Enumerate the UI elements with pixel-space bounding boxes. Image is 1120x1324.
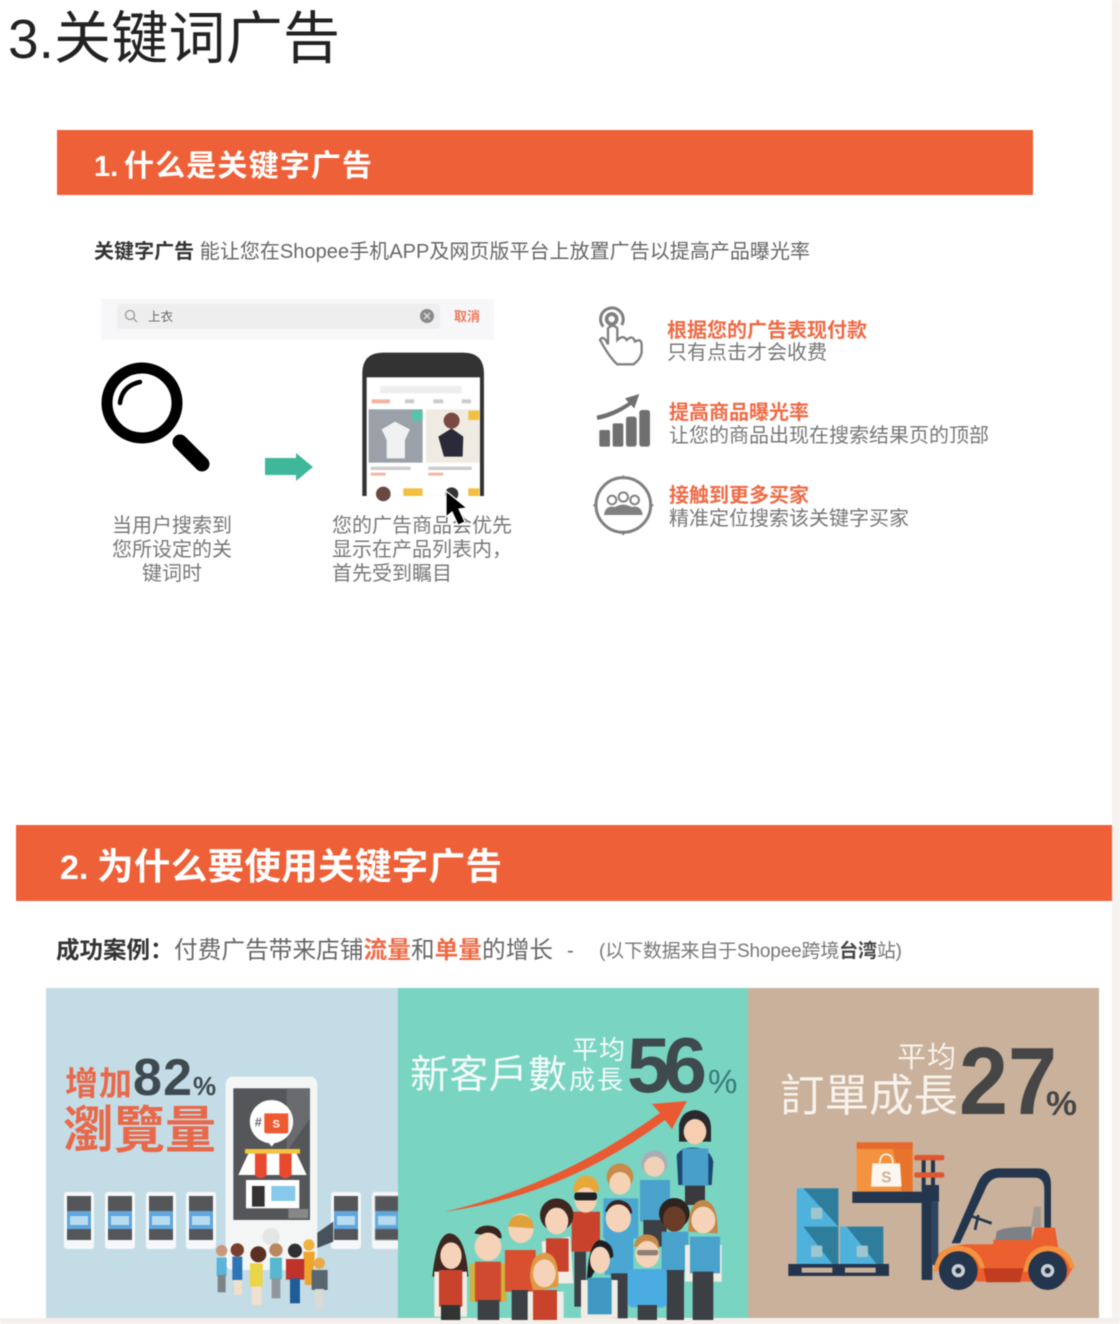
blue boxes on pallet — [788, 1188, 889, 1276]
panel heading: 56%: 新客戶數 — [410, 1054, 567, 1097]
intro text: 关键字广告 能让您在Shopee手机APP及网页版平台上放置广告以提高产品曝光率 — [94, 239, 810, 263]
benefit: reach buyers: 精准定位搜索该关键字买家 — [669, 507, 909, 530]
success case line: 付费广告带来店铺流量和单量的增长 — [174, 937, 553, 964]
large phone with shop: S — [273, 1119, 281, 1131]
orange box: S — [881, 1169, 891, 1186]
arrow: search to result — [265, 453, 313, 481]
panel heading: 56% — [410, 1021, 737, 1109]
panel heading: 27%: 27 — [959, 1028, 1057, 1135]
section header: what is keyword advertising — [57, 130, 1033, 195]
panel heading: 82%: 增加 — [65, 1065, 132, 1102]
group of shoppers — [216, 1239, 328, 1310]
panel heading: 82% — [63, 1049, 216, 1159]
large phone with shop: # — [255, 1116, 262, 1130]
icon: rising bars — [597, 394, 650, 447]
crowd of people — [432, 1109, 722, 1321]
panel heading: 27% — [780, 1028, 1077, 1135]
forklift with boxes — [788, 1142, 1075, 1290]
wheels — [939, 1251, 1067, 1290]
caption: user search: 当用户搜索到 — [112, 514, 232, 537]
panel heading: 82%: % — [193, 1071, 216, 1101]
section header: what is keyword advertising: 什么是关键字广告 — [124, 150, 372, 183]
title: 关键词广告 — [54, 7, 340, 71]
search bar — [101, 299, 494, 340]
caption: ad priority: 显示在产品列表内， — [332, 538, 512, 561]
caption: ad priority: 您的广告商品会优先 — [332, 514, 512, 537]
benefit: pay by performance: 只有点击才会收费 — [667, 341, 827, 364]
panel heading: 56%: 成長 — [569, 1065, 623, 1095]
panel heading: 56%: % — [708, 1063, 737, 1100]
mouse cursor — [446, 491, 467, 525]
icon: tapping hand — [600, 308, 642, 364]
benefit: pay by performance: 根据您的广告表现付款 — [667, 319, 867, 342]
row of small phones — [64, 1192, 402, 1249]
phone with search results — [362, 353, 484, 501]
section header: why use keyword ads — [16, 825, 1112, 901]
title: 3. — [8, 8, 54, 70]
benefit: more exposure: 让您的商品出现在搜索结果页的顶部 — [669, 424, 989, 447]
caption: user search: 键词时 — [142, 562, 202, 585]
section header: why use keyword ads: 为什么要使用关键字广告 — [97, 846, 502, 887]
icon: target audience — [593, 475, 654, 536]
benefit: more exposure: 提高商品曝光率 — [669, 400, 809, 424]
back row — [572, 1110, 713, 1307]
panel heading: 56%: 平均 — [572, 1035, 625, 1065]
large phone with shop — [226, 1077, 333, 1270]
panel heading: 27%: % — [1046, 1085, 1077, 1123]
middle row — [432, 1198, 722, 1320]
panel heading: 56%: 56 — [627, 1021, 707, 1109]
success case line: (以下数据来自于Shopee跨境台湾站) — [599, 939, 902, 962]
panel heading: 27%: 訂單成長 — [780, 1072, 958, 1121]
panel: orders up 27% — [748, 988, 1099, 1318]
front row — [528, 1234, 667, 1320]
success case line: - — [567, 940, 574, 962]
section header: why use keyword ads: 2. — [60, 849, 88, 887]
panel: page views up 82% — [46, 988, 402, 1318]
caption: user search: 您所设定的关 — [112, 538, 232, 561]
panel heading: 82%: 瀏覽量 — [63, 1102, 216, 1159]
orange box — [857, 1142, 913, 1192]
panel heading: 27%: 平均 — [897, 1041, 956, 1074]
growth arrow — [444, 1101, 687, 1212]
forklift body and cab — [933, 1168, 1075, 1282]
icon: magnifying glass — [107, 368, 202, 464]
search bar: 上衣 — [148, 309, 174, 324]
panel: new customers up 56% — [398, 988, 748, 1320]
success case line: 成功案例： — [56, 937, 174, 963]
lift mast and forks — [852, 1155, 944, 1280]
panel heading: 82%: 82 — [133, 1049, 192, 1107]
section header: what is keyword advertising: 1. — [94, 151, 118, 183]
search bar: 取消 — [454, 309, 480, 324]
benefit: reach buyers: 接触到更多买家 — [669, 483, 809, 507]
success case line — [56, 937, 902, 964]
caption: ad priority: 首先受到瞩目 — [332, 562, 452, 585]
